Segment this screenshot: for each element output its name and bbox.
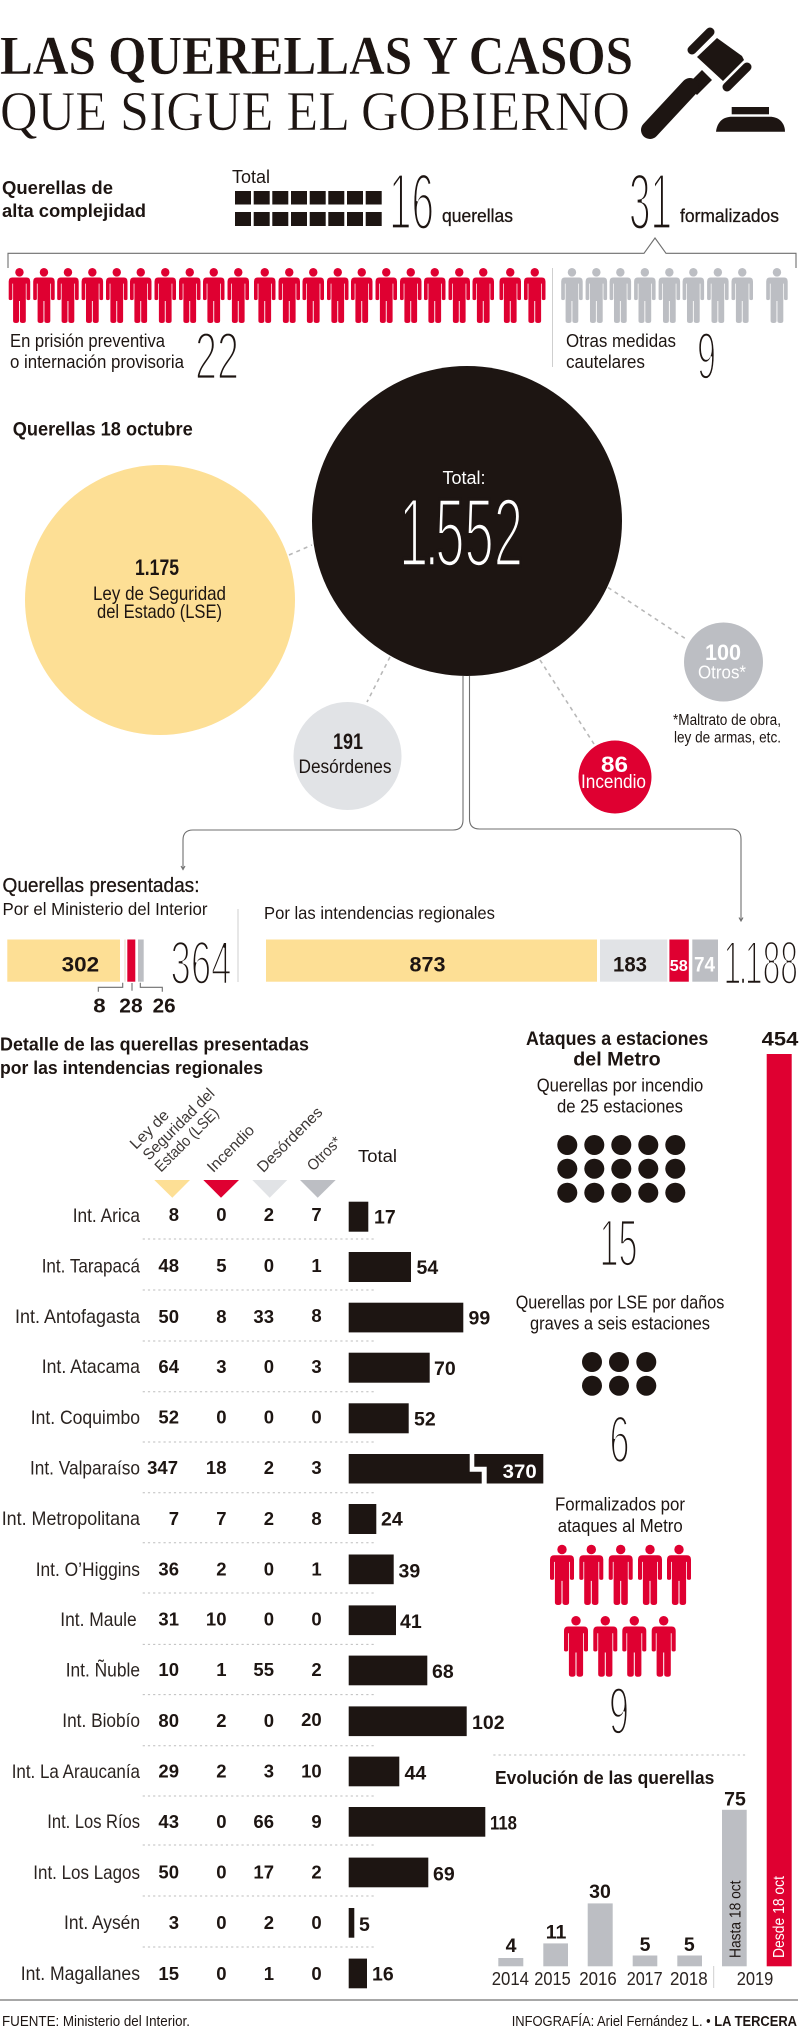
bar: 2019 desde 18 oct: 454 — [762, 1029, 798, 1051]
row: Magallanes: 0 — [216, 1963, 226, 1984]
row: La Araucanía: 10 — [301, 1760, 322, 1782]
row: Los Lagos: Int. Los Lagos — [33, 1862, 140, 1884]
number: 16 querellas: 16 — [389, 157, 434, 246]
legend triangles — [154, 1180, 336, 1198]
row: Los Lagos: 17 — [253, 1862, 274, 1882]
bar: 2018 — [670, 1934, 708, 1989]
row: Aysén: 2 — [264, 1912, 274, 1933]
row: Arica: 0 — [216, 1204, 226, 1225]
row: Magallanes: 16 — [372, 1964, 394, 1986]
bar: 2014: 2014 — [492, 1969, 529, 1989]
heading: ataques: Ataques a estaciones — [526, 1028, 708, 1050]
panel: querellas presentadas — [2, 874, 798, 1018]
row: Arica: 7 — [311, 1204, 322, 1225]
row: O'Higgins: 39 — [398, 1560, 420, 1582]
people: nine formalized — [550, 1545, 691, 1677]
row: Ñuble: 55 — [253, 1659, 274, 1680]
text: formalizados por ataques: ataques al Metro — [558, 1516, 683, 1536]
circle: ley de seguridad del estado: del Estado (LSE) — [97, 601, 222, 623]
row: O'Higgins: 1 — [311, 1558, 322, 1580]
row: Atacama: 3 — [216, 1356, 226, 1377]
heading: alta complejidad: Querellas de — [2, 177, 113, 198]
bar: 2017: 2017 — [627, 1969, 663, 1989]
row: Los Lagos: 50 — [158, 1862, 179, 1882]
row: Atacama: 3 — [311, 1356, 322, 1377]
row: Tarapacá: 5 — [216, 1255, 226, 1276]
text: otras medidas cautelares 9: 9 — [697, 319, 716, 394]
circle: total — [312, 366, 622, 676]
row: La Araucanía: 3 — [264, 1760, 274, 1782]
row: Tarapacá: 1 — [311, 1255, 322, 1276]
row: Los Ríos: 66 — [253, 1811, 274, 1832]
heading: alta complejidad: alta complejidad — [2, 200, 146, 221]
stacked bar: intendencias: 58 — [670, 958, 688, 975]
row: Metropolitana: 7 — [169, 1508, 179, 1529]
row: La Araucanía: 29 — [158, 1760, 179, 1782]
stacked bar: intendencias: 74 — [694, 954, 715, 977]
row: La Araucanía: Int. La Araucanía — [12, 1761, 140, 1783]
heading: detalle: por las intendencias regionales — [0, 1057, 263, 1078]
bar: 2016: 2016 — [579, 1969, 617, 1989]
bar: 2015: 11 — [546, 1922, 566, 1944]
row: Tarapacá: 54 — [416, 1257, 438, 1279]
arrow: to intendencias — [470, 676, 743, 921]
row: Coquimbo — [31, 1403, 436, 1433]
heading: detalle: Detalle de las querellas presentadas — [0, 1034, 309, 1055]
row: Coquimbo: 0 — [264, 1406, 274, 1428]
row: Coquimbo: 52 — [158, 1406, 179, 1428]
heading: evolución: Evolución de las querellas — [495, 1767, 714, 1788]
row: La Araucanía — [12, 1757, 426, 1786]
stacked bar: intendencias: 873 — [410, 954, 446, 977]
bar: 2019 hasta 18 oct: 75 — [724, 1789, 746, 1811]
title: LAS QUERELLAS Y CASOS — [0, 25, 633, 86]
heading: ataques — [526, 1028, 708, 1071]
row: O'Higgins: 0 — [264, 1558, 274, 1580]
row: Maule: 10 — [206, 1608, 226, 1630]
circle: desórdenes: 191 — [333, 729, 363, 754]
column headers: Incendio — [204, 1122, 258, 1176]
bar: 2017: 5 — [640, 1934, 651, 1956]
row: Atacama: Int. Atacama — [42, 1356, 140, 1378]
row: Maule: Int. Maule — [60, 1609, 137, 1631]
row: Tarapacá: Int. Tarapacá — [42, 1256, 140, 1278]
row: Biobío — [62, 1706, 505, 1736]
row: Ñuble: 1 — [216, 1659, 226, 1680]
text: querellas por incendio — [537, 1076, 703, 1117]
text: querellas por incendio: Querellas por incendio — [537, 1076, 703, 1096]
row: Metropolitana — [2, 1504, 403, 1534]
text: querellas por LSE: Querellas por LSE por daños — [516, 1292, 724, 1312]
text: querellas por incendio: de 25 estaciones — [557, 1097, 683, 1117]
row: Los Ríos: 9 — [311, 1811, 322, 1832]
row: Magallanes: 1 — [264, 1963, 274, 1984]
stacked bar: ministerio — [7, 940, 144, 982]
text: en prisión preventiva 22: o internación provisoria — [10, 352, 185, 372]
text: otras medidas cautelares 9 — [566, 319, 716, 394]
row: Tarapacá — [42, 1252, 438, 1282]
row: Atacama — [42, 1353, 456, 1383]
text: en prisión preventiva 22: 22 — [195, 319, 239, 394]
row: Antofagasta — [15, 1303, 490, 1332]
people: 9 other measures — [561, 268, 788, 323]
bar: 2019 hasta 18 oct: Hasta 18 oct — [728, 1880, 744, 1958]
circle: ley de seguridad del estado: Ley de Seguridad — [93, 583, 226, 605]
column headers: Ley de — [127, 1107, 173, 1153]
column headers: Otros* — [304, 1134, 345, 1175]
row: La Araucanía: 2 — [216, 1760, 226, 1782]
circle: desórdenes: Desórdenes — [298, 756, 392, 778]
stacked bar: intendencias — [266, 940, 718, 982]
circle: incendio: 86 — [601, 752, 628, 777]
circle: incendio: Incendio — [581, 772, 646, 793]
row: Los Lagos: 0 — [216, 1862, 226, 1882]
brackets and values: 8 28 26: 26 — [153, 995, 176, 1018]
number: 364: 364 — [170, 929, 232, 997]
heading: detalle — [0, 1034, 309, 1078]
row: Aysén: 0 — [216, 1912, 226, 1933]
row: O'Higgins: 2 — [216, 1558, 226, 1580]
arrow: to ministerio — [181, 676, 463, 870]
row: Biobío: Int. Biobío — [62, 1710, 140, 1732]
text: otras medidas cautelares 9: cautelares — [566, 352, 645, 372]
heading: querellas presentadas: Por el Ministerio del Interior — [2, 899, 208, 919]
row: Arica: 8 — [169, 1204, 179, 1225]
footnote: otros: ley de armas, etc. — [674, 730, 781, 746]
heading: alta complejidad — [2, 177, 146, 221]
row: Valparaíso: 2 — [264, 1457, 274, 1478]
row: Los Lagos: 69 — [433, 1864, 455, 1886]
bar: 2018: 2018 — [670, 1969, 708, 1989]
circle: otros: 100 — [705, 640, 741, 665]
row: Aysén: Int. Aysén — [64, 1912, 140, 1934]
row: Valparaíso: 18 — [206, 1457, 226, 1478]
row: Magallanes — [21, 1959, 394, 1988]
row: Los Ríos: Int. Los Ríos — [47, 1811, 140, 1833]
row: Metropolitana: 8 — [311, 1508, 322, 1529]
row: O'Higgins — [36, 1554, 420, 1584]
circle: total: 1.552 — [399, 478, 523, 587]
row: Coquimbo: Int. Coquimbo — [31, 1407, 140, 1429]
row: Antofagasta: Int. Antofagasta — [15, 1306, 140, 1328]
row: Biobío: 102 — [472, 1712, 505, 1734]
circle: desórdenes — [294, 702, 402, 810]
dotted row separators — [143, 1239, 376, 1947]
column headers: Total — [358, 1146, 397, 1166]
row: Aysén: 3 — [169, 1912, 179, 1933]
row: Magallanes: 0 — [311, 1963, 322, 1984]
row: Ñuble — [66, 1656, 454, 1685]
bar: 2018: 5 — [684, 1934, 695, 1956]
row: Maule — [60, 1605, 422, 1635]
stacked bar: ministerio: 302 — [62, 954, 99, 977]
bar: 2019 desde 18 oct: Desde 18 oct — [771, 1875, 788, 1958]
title — [0, 25, 633, 143]
brackets and values: 8 28 26: 28 — [119, 995, 143, 1018]
row: Biobío: 80 — [158, 1710, 179, 1731]
row: Valparaíso: 370 — [503, 1461, 537, 1483]
row: Los Ríos: 43 — [158, 1811, 179, 1832]
row: Tarapacá: 0 — [264, 1255, 274, 1276]
row: Magallanes: Int. Magallanes — [21, 1963, 140, 1985]
brackets and values: 8 28 26 — [93, 983, 176, 1018]
number: 15: 15 — [600, 1206, 638, 1281]
circle: ley de seguridad del estado: 1.175 — [135, 555, 179, 580]
text: en prisión preventiva 22: En prisión preventiva — [10, 331, 166, 351]
heading: por las intendencias regionales: Por las intendencias regionales — [264, 903, 495, 923]
column headers: Estado (LSE) — [152, 1105, 223, 1176]
row: Ñuble: 68 — [432, 1661, 454, 1683]
row: La Araucanía: 44 — [404, 1762, 426, 1784]
row: Aysén — [64, 1908, 370, 1938]
number: 31 formalizados: 31 — [629, 157, 672, 246]
row: Los Ríos: 118 — [490, 1812, 517, 1834]
text: en prisión preventiva 22 — [10, 319, 239, 394]
row: Los Lagos — [33, 1858, 455, 1887]
row: Biobío: 20 — [301, 1709, 322, 1730]
row: Antofagasta: 8 — [216, 1306, 226, 1327]
text: querellas por LSE — [516, 1292, 724, 1333]
column headers: Seguridad del — [140, 1085, 218, 1164]
panel: detalle por intendencias — [0, 1034, 543, 1988]
row: Arica: Int. Arica — [73, 1205, 140, 1227]
row: Aysén: 5 — [359, 1914, 370, 1936]
row: Biobío: 0 — [264, 1710, 274, 1731]
row: Antofagasta: 99 — [468, 1308, 490, 1330]
row: Arica: 17 — [374, 1206, 396, 1228]
number: 31 formalizados — [629, 157, 779, 246]
row: Magallanes: 15 — [158, 1963, 179, 1984]
row: Valparaíso: 3 — [311, 1457, 322, 1478]
row: Biobío: 2 — [216, 1710, 226, 1731]
row: Metropolitana: 2 — [264, 1508, 274, 1529]
people: 22 in preventive detention — [9, 268, 545, 323]
circle: otros — [684, 622, 763, 702]
row: Atacama: 0 — [264, 1356, 274, 1377]
number: 16 querellas: querellas — [442, 206, 513, 226]
row: O'Higgins: 36 — [158, 1558, 179, 1580]
icon: sixteen squares — [235, 191, 382, 226]
row: Metropolitana: 24 — [381, 1508, 403, 1530]
row: Ñuble: Int. Ñuble — [66, 1658, 140, 1682]
row: Tarapacá: 48 — [158, 1255, 179, 1276]
circle: ley de seguridad del estado — [25, 465, 295, 735]
dashed connectors — [289, 545, 686, 744]
row: Los Ríos: 0 — [216, 1811, 226, 1832]
column headers — [127, 1085, 397, 1176]
row: O'Higgins: Int. O’Higgins — [36, 1559, 140, 1581]
row: Maule: 0 — [311, 1608, 322, 1630]
row: Coquimbo: 0 — [311, 1406, 322, 1428]
row: Valparaíso: Int. Valparaíso — [30, 1458, 140, 1480]
icon: fifteen dots — [557, 1135, 685, 1203]
heading: querellas 18 octubre: Querellas 18 octubre — [13, 419, 193, 441]
row: Metropolitana: 7 — [216, 1508, 226, 1529]
number: 31 formalizados: formalizados — [680, 206, 779, 226]
circle: otros: Otros* — [698, 663, 746, 683]
icon: six dots — [582, 1352, 656, 1396]
number: 6: 6 — [610, 1402, 630, 1478]
row: Maule: 31 — [158, 1608, 179, 1630]
row: Arica: 2 — [264, 1204, 274, 1225]
row: Valparaíso — [30, 1454, 543, 1484]
title: QUE SIGUE EL GOBIERNO — [0, 81, 630, 143]
panel: querellas 18 octubre — [13, 366, 781, 921]
circle: incendio — [578, 740, 652, 814]
bar: 2016: 30 — [589, 1881, 611, 1903]
column headers: Desórdenes — [254, 1104, 326, 1176]
row: Atacama: 70 — [434, 1358, 456, 1380]
row: Antofagasta: 33 — [253, 1306, 274, 1327]
row: Arica — [73, 1202, 396, 1232]
row: Valparaíso: 347 — [147, 1457, 178, 1478]
bar: 2016 — [579, 1881, 617, 1989]
label: total: Total — [232, 167, 270, 187]
footnote: otros — [673, 712, 781, 746]
row: Antofagasta: 50 — [158, 1306, 179, 1327]
bracket — [8, 238, 796, 268]
icon: gavel — [650, 32, 785, 132]
heading: querellas presentadas — [2, 874, 208, 919]
circle: total: Total: — [442, 467, 486, 488]
bar: 2019 desde 18 oct — [762, 1029, 798, 1966]
bar: 2015: 2015 — [534, 1969, 571, 1989]
text: formalizados por ataques — [555, 1495, 685, 1536]
bar: 2019 hasta 18 oct — [722, 1789, 747, 1966]
label: 2019: 2019 — [737, 1969, 773, 1989]
row: Metropolitana: Int. Metropolitana — [2, 1508, 140, 1530]
bar: 2017 — [627, 1934, 663, 1989]
bar: 2014 — [492, 1935, 529, 1989]
row: Antofagasta: 8 — [311, 1305, 322, 1326]
row: Los Ríos — [47, 1807, 517, 1837]
footnote: otros: *Maltrato de obra, — [673, 712, 781, 729]
text: querellas por LSE: graves a seis estaciones — [530, 1313, 710, 1333]
stacked bar: intendencias: 183 — [613, 954, 647, 977]
row: Ñuble: 10 — [158, 1659, 179, 1680]
heading: querellas presentadas: Querellas presentadas: — [2, 874, 200, 897]
panel: ataques a estaciones del metro — [516, 1028, 724, 1749]
bar: 2015 — [534, 1922, 571, 1989]
row: Maule: 41 — [400, 1611, 422, 1633]
row: Atacama: 64 — [158, 1356, 180, 1377]
number: 9: 9 — [609, 1674, 629, 1749]
text: formalizados por ataques: Formalizados por — [555, 1495, 685, 1515]
row: Aysén: 0 — [311, 1912, 322, 1933]
panel: evolución de las querellas — [492, 1029, 798, 1989]
row: Maule: 0 — [264, 1608, 274, 1630]
heading: ataques: del Metro — [573, 1049, 661, 1071]
row: Coquimbo: 0 — [216, 1406, 226, 1428]
panel: querellas de alta complejidad — [2, 157, 796, 394]
row: Los Lagos: 2 — [311, 1862, 322, 1882]
row: Ñuble: 2 — [311, 1659, 322, 1680]
row: Coquimbo: 52 — [414, 1408, 436, 1430]
bar: 2014: 4 — [506, 1935, 517, 1957]
text: otras medidas cautelares 9: Otras medidas — [566, 331, 676, 351]
brackets and values: 8 28 26: 8 — [93, 995, 106, 1018]
